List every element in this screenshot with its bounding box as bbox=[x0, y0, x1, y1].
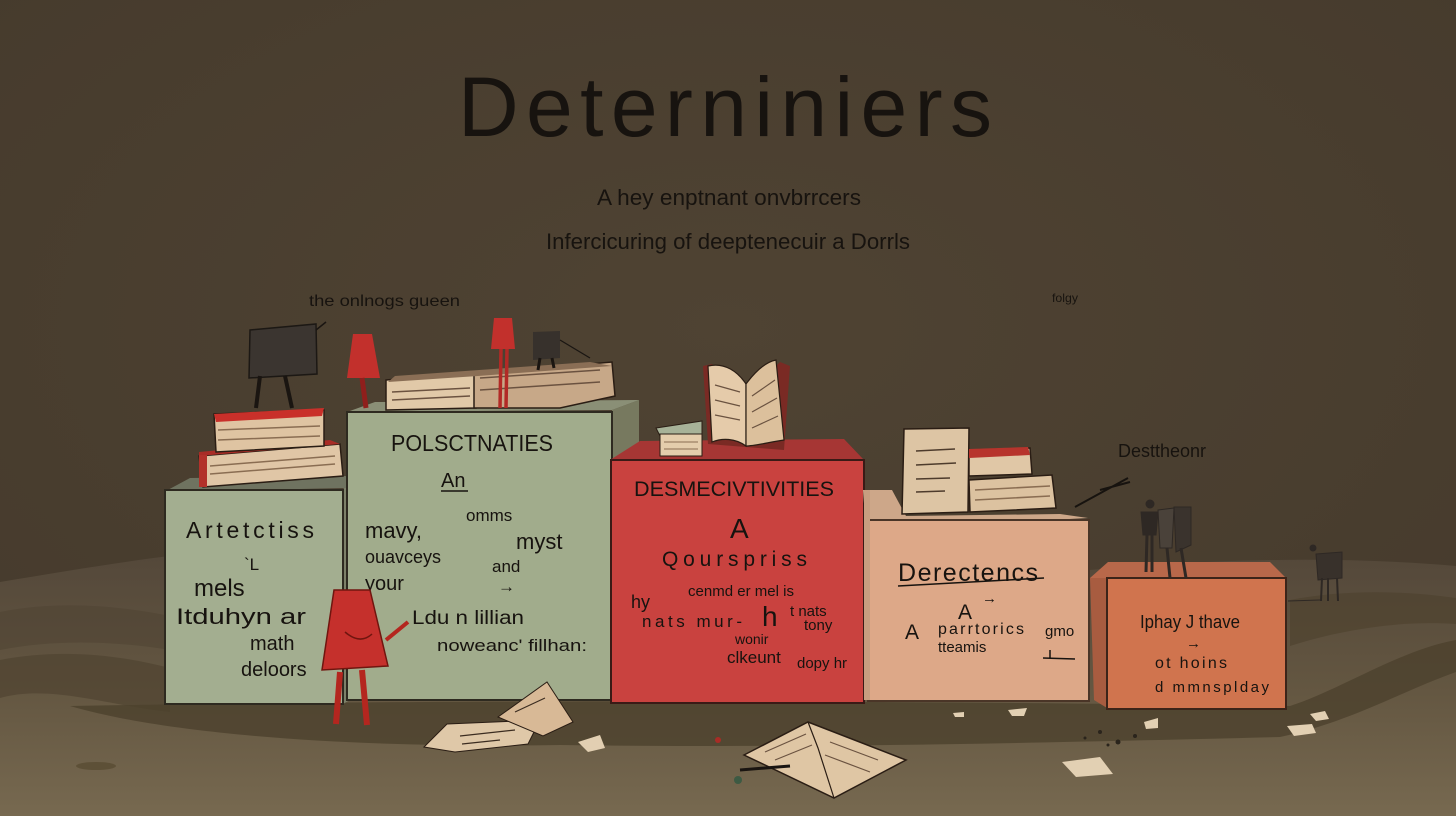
icon: open book on red box bbox=[703, 360, 790, 450]
panel: peach box Determiners: A bbox=[958, 601, 972, 624]
panel: green box Possessives: your bbox=[365, 573, 404, 595]
panel: peach box Determiners: gmo bbox=[1045, 623, 1074, 640]
icon: red lamp figure bbox=[347, 334, 380, 408]
panel: green box Articles: `L bbox=[244, 555, 259, 574]
icon: red figure in foreground bbox=[322, 590, 408, 725]
panel: peach box Determiners bbox=[863, 490, 1089, 701]
panel: red box Demonstratives: tony bbox=[804, 617, 833, 634]
panel: red box Demonstratives: dopy hr bbox=[797, 655, 847, 672]
panel: green box Possessives: omms bbox=[466, 506, 512, 525]
panel: green box Articles: mels bbox=[194, 575, 245, 602]
panel: green box Articles: Itduhyn ar bbox=[176, 604, 306, 629]
icon: papers on the floor left bbox=[424, 682, 605, 752]
small annotations: the onlnogs gueen bbox=[309, 293, 460, 310]
panel: red box Demonstratives: hy bbox=[631, 592, 650, 612]
title: Deterniniers bbox=[458, 60, 992, 154]
subtitle: A hey enptnant onvbrrcers bbox=[597, 185, 861, 210]
panel: orange box Quantifiers: ot hoins bbox=[1155, 655, 1227, 672]
panel: green box Possessives: and bbox=[492, 557, 520, 576]
icon: small distant figure bbox=[1288, 545, 1342, 601]
panel: orange box Quantifiers: d mmnsplday bbox=[1155, 679, 1270, 696]
panel: orange box Quantifiers: Iphay J thave bbox=[1140, 612, 1240, 632]
panel: red box Demonstratives: wonir bbox=[734, 631, 769, 647]
panel: peach box Determiners: Derectencs bbox=[898, 559, 1038, 587]
panel: green box Possessives: ouavceys bbox=[365, 547, 441, 567]
panel: green box Possessives bbox=[347, 400, 639, 700]
ground bbox=[0, 556, 1456, 816]
small annotations bbox=[309, 291, 1206, 507]
panel: red box Demonstratives: cenmd er mel is bbox=[688, 583, 794, 600]
panel: red box Demonstratives: clkeunt bbox=[727, 648, 781, 667]
panel: green box Articles: Artetctiss bbox=[186, 517, 314, 543]
panel: orange box Quantifiers bbox=[1090, 562, 1286, 709]
panel: green box Possessives: mavy, bbox=[365, 518, 422, 543]
panel: green box Possessives: Ldu n lillian bbox=[412, 608, 524, 629]
panel: red box Demonstratives: h bbox=[762, 601, 778, 632]
small annotations: folgy bbox=[1052, 291, 1078, 305]
panel: green box Articles bbox=[164, 476, 350, 704]
panel: green box Possessives: An bbox=[441, 470, 465, 492]
icon: small figures on orange box bbox=[1141, 500, 1191, 578]
panel: peach box Determiners: parrtorics bbox=[938, 621, 1024, 638]
panel: red box Demonstratives bbox=[610, 439, 864, 703]
icon: note and books on peach box bbox=[902, 428, 1056, 514]
panel: red box Demonstratives: Qourspriss bbox=[662, 548, 807, 571]
panel: green box Possessives: noweanc' fillhan: bbox=[437, 636, 587, 655]
panel: peach box Determiners: A bbox=[905, 621, 919, 644]
books: small book beside open book bbox=[656, 421, 702, 456]
panel: green box Possessives: myst bbox=[516, 529, 562, 554]
panel: red box Demonstratives: A bbox=[730, 513, 749, 544]
icon: open book on the floor bbox=[715, 722, 906, 798]
books: stack on left green box bbox=[199, 408, 343, 487]
panel: red box Demonstratives: nats mur- bbox=[642, 612, 742, 631]
panel: green box Possessives: POLSCTNATIES bbox=[391, 430, 553, 456]
panel: green box Articles: deloors bbox=[241, 659, 307, 681]
panel: orange box Quantifiers: → bbox=[1186, 635, 1201, 652]
icon: paper scraps on the floor bbox=[953, 708, 1329, 777]
subtitle: Infercicuring of deeptenecuir a Dorrls bbox=[546, 229, 910, 254]
panel: red box Demonstratives: t nats bbox=[790, 603, 827, 620]
panel: peach box Determiners: tteamis bbox=[938, 639, 986, 656]
icon: dark creature on books bbox=[249, 322, 326, 408]
panel: green box Articles: math bbox=[250, 633, 294, 655]
icon: red lamp and dark figure on books bbox=[491, 318, 590, 408]
books: stack on green box bbox=[386, 362, 615, 410]
subtitle bbox=[546, 185, 910, 254]
panel: peach box Determiners: → bbox=[982, 590, 997, 607]
small annotations: Desttheonr bbox=[1118, 441, 1206, 461]
panel: green box Possessives: → bbox=[498, 577, 515, 596]
panel: red box Demonstratives: DESMECIVTIVITIES bbox=[634, 478, 834, 501]
